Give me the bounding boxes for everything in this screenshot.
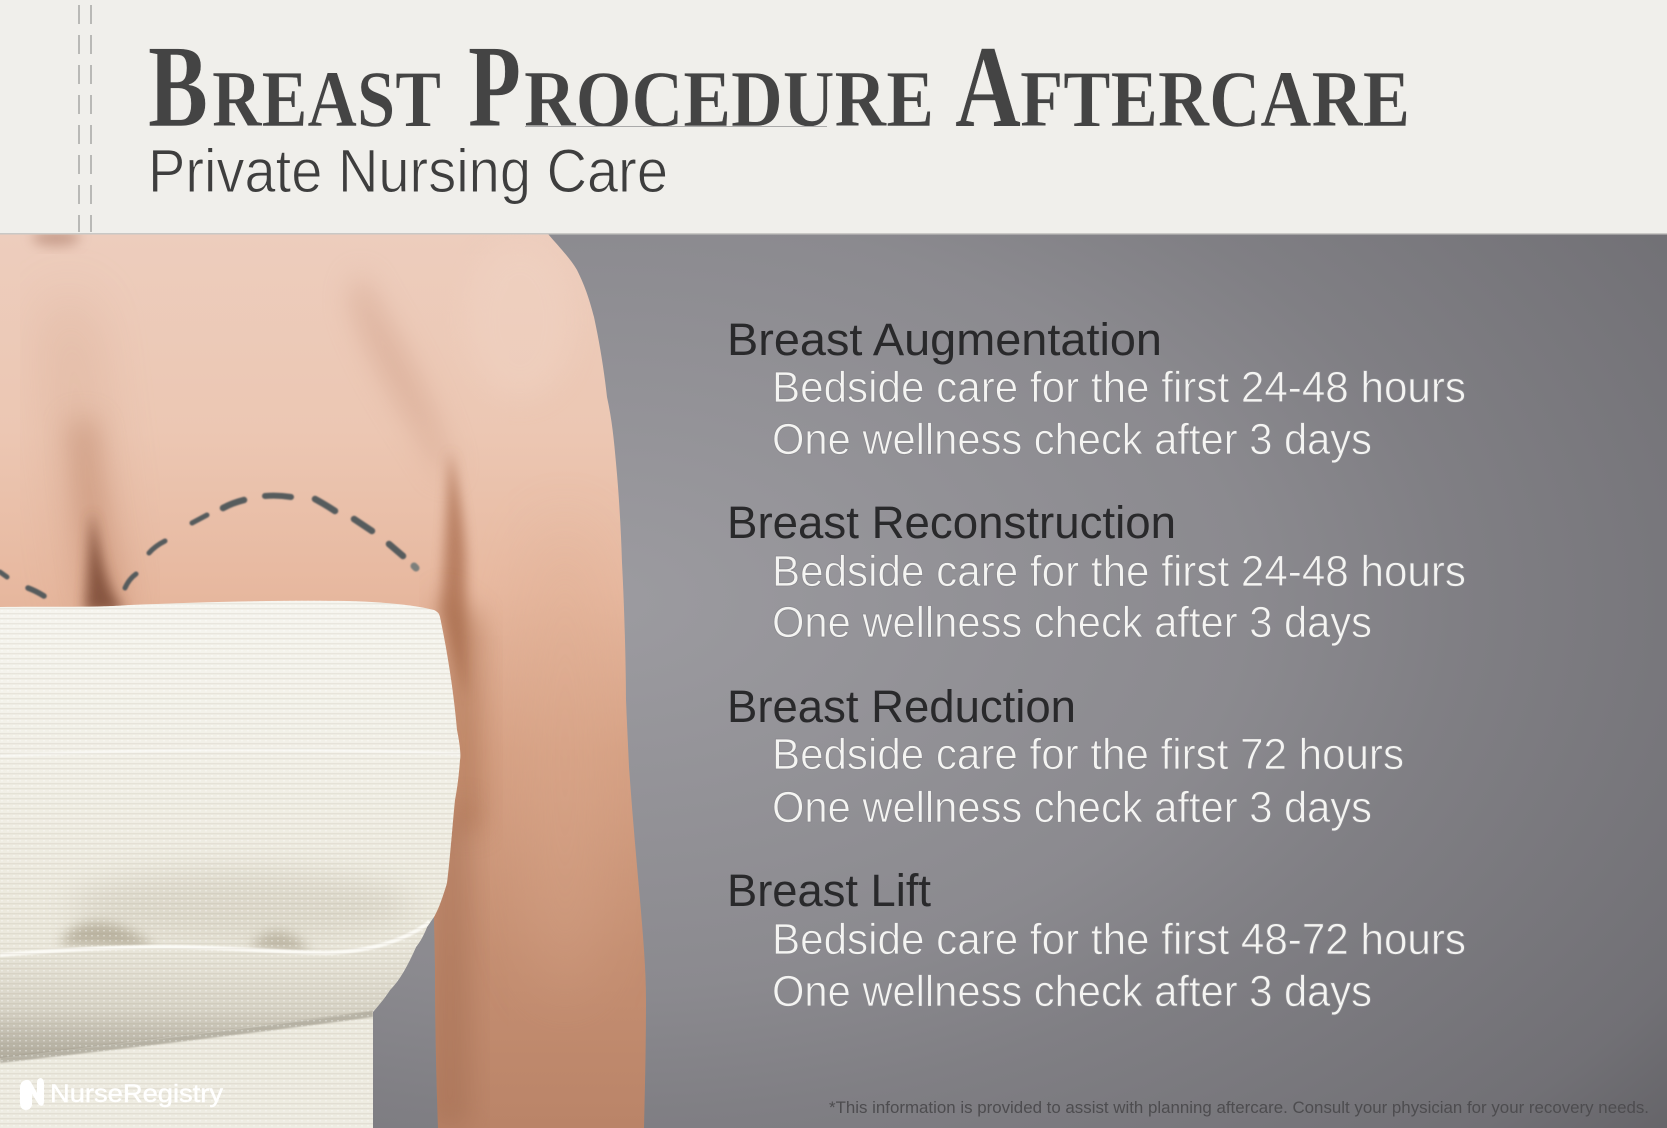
icon: N mark	[20, 1078, 44, 1110]
wellness check line: One wellness check after 3 days	[772, 967, 1372, 1016]
procedure: Breast Reduction	[727, 681, 1404, 832]
bedside care line: Bedside care for the first 48-72 hours	[772, 915, 1466, 964]
photo: torso with bandage	[0, 230, 660, 1128]
stitched dashed lines	[79, 5, 91, 232]
title: FTERCARE	[1020, 56, 1410, 144]
title: REAST	[212, 56, 441, 144]
bedside care line: Bedside care for the first 24-48 hours	[772, 547, 1466, 596]
procedure: Breast Lift	[727, 865, 1466, 1016]
heading: Breast Reconstruction	[727, 497, 1176, 548]
wellness check line: One wellness check after 3 days	[772, 598, 1372, 647]
title	[148, 21, 1410, 152]
skin: chest, shoulder and arm	[0, 230, 660, 1128]
subtitle: Private Nursing Care	[148, 137, 668, 205]
logo: NurseRegistry	[20, 1078, 224, 1110]
bedside care line: Bedside care for the first 24-48 hours	[772, 363, 1466, 412]
footnote disclaimer: *This information is provided to assist with planning aftercare. Consult your physician for your recovery needs.	[829, 1098, 1649, 1117]
elastic bandage wrap	[0, 600, 480, 1128]
wellness check line: One wellness check after 3 days	[772, 783, 1372, 832]
procedure: Breast Reconstruction	[727, 497, 1466, 647]
logo wordmark: NurseRegistry	[50, 1080, 224, 1108]
heading: Breast Reduction	[727, 681, 1076, 732]
heading: Breast Lift	[727, 865, 931, 916]
wellness check line: One wellness check after 3 days	[772, 415, 1372, 464]
procedure: Breast Augmentation	[727, 314, 1466, 464]
surgical marking: dashed incision lines	[0, 496, 416, 596]
title: ROCEDURE	[524, 56, 934, 144]
bedside care line: Bedside care for the first 72 hours	[772, 730, 1404, 779]
heading: Breast Augmentation	[727, 314, 1162, 365]
title: A	[955, 21, 1021, 152]
title: B	[148, 21, 208, 152]
gray gradient background panel	[0, 233, 1667, 1128]
header band	[0, 0, 1667, 234]
title: P	[468, 21, 521, 152]
